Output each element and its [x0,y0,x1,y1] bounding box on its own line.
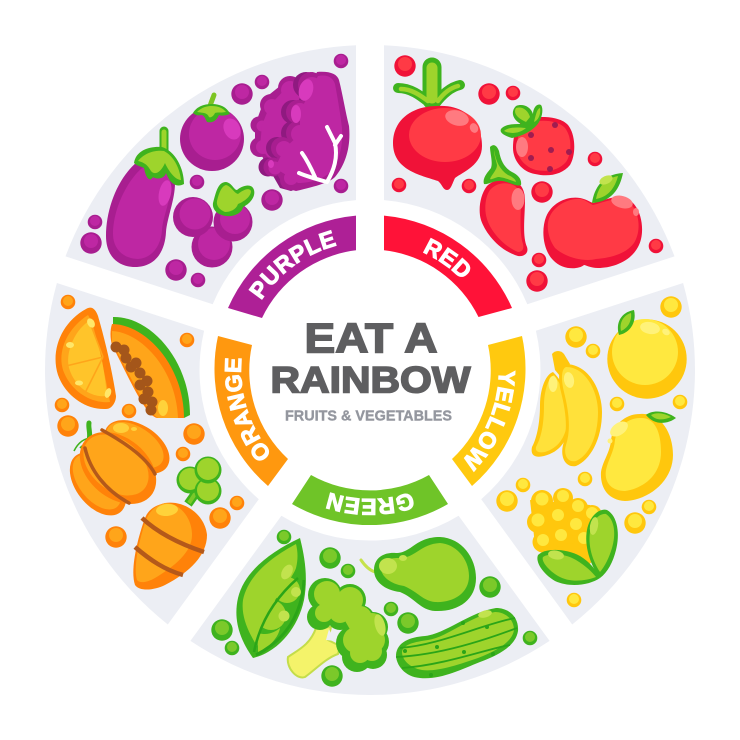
icon: papaya [110,317,190,418]
icon: mangosteen [180,95,244,171]
icon: grapes [173,182,254,268]
icon: orange slice [56,308,116,409]
red dots [392,55,663,292]
label band: yellow: YELLOW [464,370,516,472]
icon: pear [361,537,476,611]
panel: green foods [190,516,550,695]
label band: orange [214,336,288,486]
icon: eggplant [106,131,184,267]
panel: orange foods [45,283,259,624]
orange dots [55,295,244,548]
icon: corn [527,488,602,570]
icon: apple [543,173,642,268]
label band: red [384,216,512,317]
dot over cabbage [334,179,348,193]
yellow dots [496,296,687,607]
label band: purple [228,216,356,318]
label band: red: RED [423,238,470,277]
icon: carrot [133,456,222,590]
label band: orange: ORANGE [224,358,270,461]
label band: yellow [452,336,526,486]
subtitle: FRUITS & VEGETABLES [285,408,452,424]
icon: pea pod [236,538,306,658]
title [270,314,471,400]
panel: purple foods [66,45,356,304]
icon: corn husk leaves [537,510,618,585]
panel: yellow foods [481,283,695,624]
icon: strawberry [501,105,574,175]
icon: radish [393,67,482,190]
icon: cucumber [396,608,518,678]
title: EAT A [304,314,438,362]
title: RAINBOW [270,360,471,400]
label band: purple: PURPLE [248,230,337,300]
panel: red foods [384,45,674,304]
icon: lemon [607,310,687,399]
icon: mango [601,412,676,501]
icon: broccoli [288,578,389,677]
icon: chili pepper [480,145,527,256]
icon: pumpkin [58,409,179,526]
icon: banana [532,351,602,466]
icon: purple cabbage [250,72,349,191]
label band: green [292,475,448,525]
green dots [211,530,537,687]
purple dots [80,54,348,287]
label band: green: GREEN [326,492,414,516]
